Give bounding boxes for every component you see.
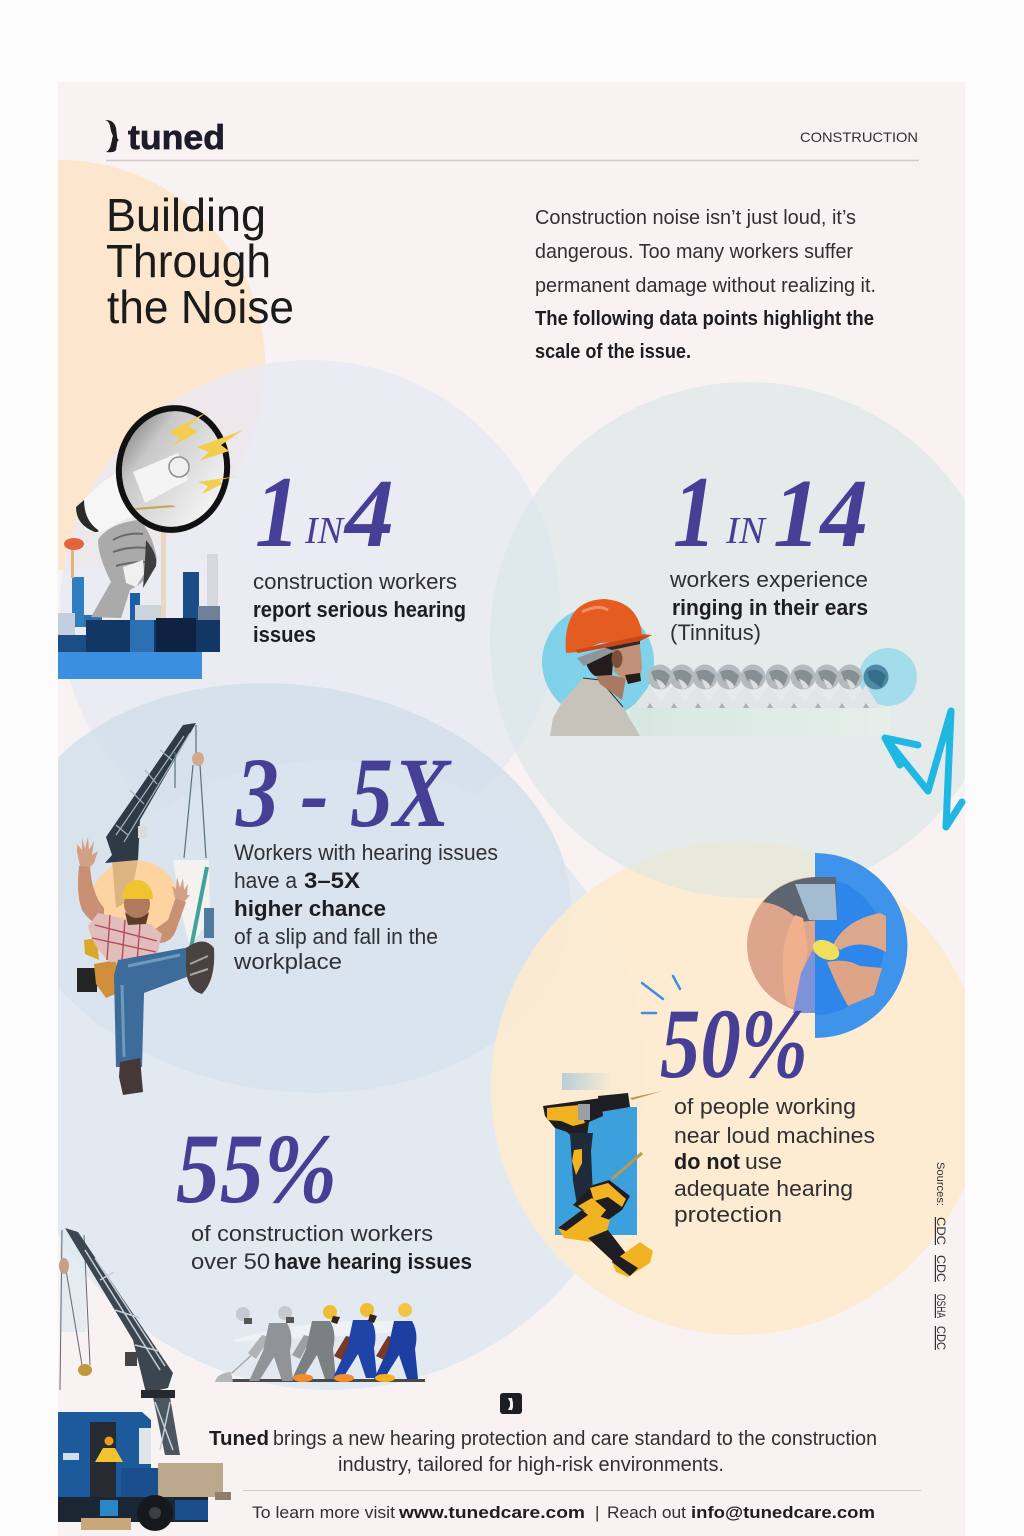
stat: 1 in 4: 4 xyxy=(343,460,394,568)
stat: 50%: adequate hearing xyxy=(674,1176,853,1201)
stat: 1 in 14: IN xyxy=(725,510,768,552)
head and hard hat xyxy=(124,889,150,919)
stat: 55% xyxy=(176,1113,472,1274)
stat: 3-5X: higher chance xyxy=(234,896,386,921)
illustration: falling worker on crane xyxy=(77,723,214,1095)
row of cones xyxy=(632,685,880,708)
stat: 50%: of people working xyxy=(674,1094,856,1119)
stat: 55%: of construction workers xyxy=(191,1221,433,1246)
lightning bolts xyxy=(169,412,243,494)
closing statement: brings a new hearing protection and care standard to the construction xyxy=(273,1428,877,1450)
stat: 1 in 14: workers experience xyxy=(669,567,868,592)
row of heads xyxy=(648,664,888,690)
third figure xyxy=(333,1303,377,1382)
contact footer: | xyxy=(595,1503,599,1522)
sources: CDC xyxy=(934,1255,948,1282)
stat: 3-5X: 3 - 5X xyxy=(235,737,452,848)
stat: 50%: near loud machines xyxy=(674,1123,875,1148)
worker figure xyxy=(550,599,652,736)
stat: 1 in 4: construction workers xyxy=(253,569,457,594)
sources: CDC xyxy=(934,1326,948,1350)
illustration: worker and row of heads xyxy=(542,599,917,736)
icon: cyan zigzag arrow xyxy=(885,711,962,827)
sources: OSHA xyxy=(934,1294,948,1318)
stat: 1 in 14: ringing in their ears xyxy=(672,595,868,620)
stat: 3-5X: have a xyxy=(234,868,298,893)
sources xyxy=(934,1162,948,1350)
logo: tuned xyxy=(128,119,225,157)
contact footer xyxy=(252,1503,875,1522)
stat: 1 in 4: report serious hearing xyxy=(253,597,466,622)
stat: 3-5X: Workers with hearing issues xyxy=(234,840,498,865)
shirt xyxy=(88,913,162,962)
stat: 1 in 14: (Tinnitus) xyxy=(670,620,761,645)
fourth figure xyxy=(374,1303,418,1382)
title: Building xyxy=(106,189,266,241)
icon: small logo badge xyxy=(500,1393,522,1414)
contact footer: info@tunedcare.com xyxy=(691,1503,875,1522)
sources: CDC xyxy=(934,1217,948,1245)
title: the Noise xyxy=(107,281,294,333)
illustration: earplug photo circle xyxy=(747,853,908,1038)
stat: 1 in 4 xyxy=(253,456,466,647)
stat: 1 in 4: IN xyxy=(304,510,346,552)
stat: 1 in 14: 14 xyxy=(773,460,868,568)
horn xyxy=(111,401,235,537)
closing statement: Tuned xyxy=(209,1428,269,1450)
legs xyxy=(114,947,192,1067)
contact footer: To learn more visit xyxy=(252,1503,395,1522)
stat: 3-5X xyxy=(233,737,498,974)
stat: 55%: 55% xyxy=(176,1113,337,1224)
upper drill xyxy=(543,1091,662,1205)
intro paragraph: permanent damage without realizing it. xyxy=(535,275,876,297)
second figure xyxy=(292,1305,340,1382)
stat: 50%: protection xyxy=(674,1202,782,1227)
sources: Sources: xyxy=(934,1162,946,1206)
intro paragraph: Construction noise isn’t just loud, it’s xyxy=(535,207,856,229)
stat: 50%: do not xyxy=(674,1149,741,1174)
megaphone body xyxy=(76,462,170,532)
intro paragraph: dangerous. Too many workers suffer xyxy=(535,241,853,263)
illustration: crane truck xyxy=(58,1228,231,1531)
stat: 1 in 4: issues xyxy=(253,622,316,647)
icon: emphasis ticks xyxy=(642,976,680,1013)
illustration: power drills xyxy=(543,1073,662,1277)
tool belt xyxy=(77,968,97,992)
lower drill xyxy=(558,1153,653,1277)
stat: 50%: use xyxy=(745,1149,782,1174)
illustration: line of workers xyxy=(215,1303,425,1382)
stat: 3-5X: 3–5X xyxy=(304,868,360,893)
truck chassis xyxy=(121,1468,181,1497)
boom xyxy=(65,1228,173,1393)
stat: 3-5X: workplace xyxy=(233,949,342,974)
closing statement xyxy=(209,1428,877,1476)
closing statement: industry, tailored for high-risk environments. xyxy=(338,1454,724,1476)
crane boom and hoist xyxy=(105,723,214,953)
stat: 50%: 50% xyxy=(660,988,808,1099)
title: Through xyxy=(106,235,271,287)
pole xyxy=(161,525,166,618)
stat: 1 in 14 xyxy=(669,456,868,645)
hand holding handle xyxy=(91,520,157,618)
stat: 3-5X: of a slip and fall in the xyxy=(234,924,438,949)
contact footer: www.tunedcare.com xyxy=(398,1503,585,1522)
stat: 1 in 14: 1 xyxy=(673,456,716,569)
intro paragraph: The following data points highlight the xyxy=(535,308,874,330)
intro paragraph: scale of the issue. xyxy=(535,341,691,363)
stat: 1 in 4: 1 xyxy=(255,456,300,569)
arms xyxy=(78,866,104,926)
cab xyxy=(58,1412,151,1497)
contact footer: Reach out xyxy=(607,1503,686,1522)
intro paragraph xyxy=(535,207,876,363)
stat: 50% xyxy=(660,988,875,1227)
title xyxy=(106,189,294,333)
icon: megaphone over city xyxy=(58,401,243,679)
stat: 55%: have hearing issues xyxy=(274,1249,472,1274)
city skyline xyxy=(58,538,220,652)
shovel and first figure xyxy=(215,1306,294,1382)
sector label: CONSTRUCTION xyxy=(800,129,918,145)
stat: 55%: over 50 xyxy=(191,1249,270,1274)
